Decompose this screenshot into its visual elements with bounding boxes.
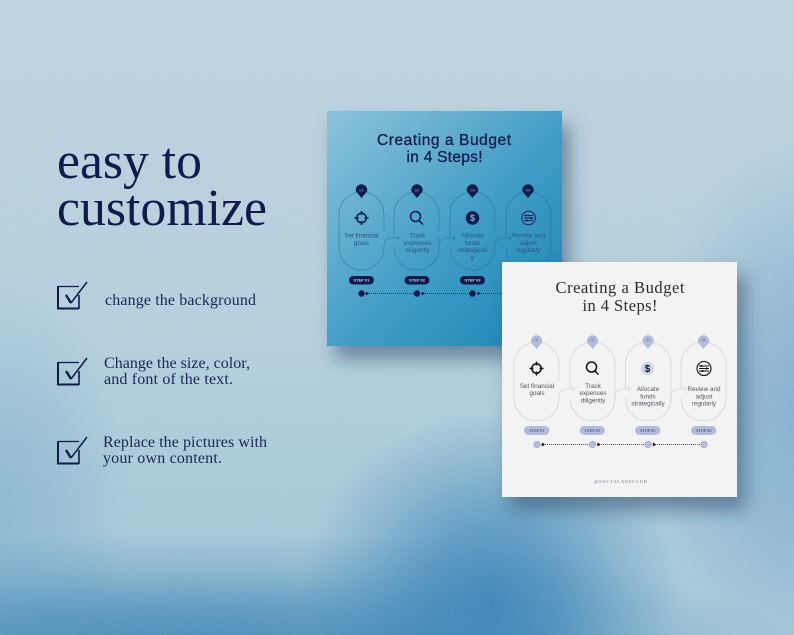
icon: magnifier <box>410 212 423 224</box>
pin numbers <box>359 188 531 192</box>
step text: y <box>471 254 475 262</box>
heading: easy to customize: customize <box>57 180 267 237</box>
step text: Set financial <box>344 232 379 240</box>
text: replace pictures: Replace the pictures with <box>103 434 267 451</box>
step labels: STEP 02 <box>409 278 426 283</box>
icon: magnifier <box>586 362 598 374</box>
icon: target <box>530 362 544 376</box>
pin numbers: 01 <box>359 188 364 192</box>
step text: expenses <box>580 390 606 397</box>
title: blue card: Creating a Budget <box>377 132 512 149</box>
heading: easy to customize <box>57 133 267 237</box>
step text: diligently <box>581 398 606 404</box>
step text: goals <box>529 390 545 397</box>
pin numbers: 02 <box>590 338 594 342</box>
step text: regularly <box>516 247 541 254</box>
step outlines with connecting arrows <box>339 192 551 270</box>
checklist item: change size, color, font <box>57 355 250 388</box>
icon: sliders <box>522 211 535 225</box>
pin numbers: 03 <box>470 188 475 192</box>
icon: dollar <box>466 211 479 225</box>
step text: adjust <box>696 394 713 400</box>
icon: checkbox 2 <box>57 358 87 385</box>
step text: Allocate <box>637 386 660 393</box>
pin numbers: 04 <box>526 188 531 192</box>
title: blue card <box>377 132 512 166</box>
step text: diligently <box>405 247 431 254</box>
handle: @SOCIALADSCLUB: @SOCIALADSCLUB <box>594 479 647 484</box>
step text: goals <box>354 240 369 247</box>
timeline <box>358 290 505 297</box>
icon: dollar: $ <box>645 364 651 375</box>
step text: strategicall <box>457 247 488 254</box>
title: white card: Creating a Budget <box>556 278 685 297</box>
text: change size, color, font: and font of the text. <box>104 371 233 388</box>
text: replace pictures <box>103 434 267 467</box>
pin numbers: 04 <box>702 338 706 342</box>
pin numbers <box>534 338 706 342</box>
icon: target <box>354 211 368 225</box>
checklist item: replace pictures <box>57 434 267 467</box>
text: replace pictures: your own content. <box>103 450 222 467</box>
number pins <box>531 335 709 349</box>
icon: sliders <box>697 362 711 376</box>
step labels: STEP 01 <box>529 428 544 433</box>
step text: Review and <box>688 386 721 393</box>
step labels: STEP 02 <box>584 428 600 433</box>
title: white card: in 4 Steps! <box>582 296 658 315</box>
step text: funds <box>640 394 656 400</box>
step text: Allocate <box>461 232 484 240</box>
panel: blue budget card <box>327 111 562 346</box>
heading: easy to customize: easy to <box>57 133 202 190</box>
step labels <box>524 426 716 435</box>
step text: expenses <box>404 240 431 247</box>
step labels: STEP 01 <box>354 278 370 283</box>
step text <box>520 383 721 408</box>
step text <box>344 232 545 262</box>
step outlines with connecting arrows <box>514 342 726 421</box>
checklist item: change the background <box>57 282 256 309</box>
icon: dollar <box>641 362 654 375</box>
step text: regularly <box>692 400 717 408</box>
step labels: STEP 04 <box>696 428 712 433</box>
timeline <box>534 441 707 448</box>
step labels: STEP 03 <box>465 278 481 283</box>
text: change size, color, font <box>104 355 250 388</box>
pin numbers: 03 <box>646 338 650 342</box>
number pins <box>356 184 534 198</box>
step text: Review and <box>512 232 545 240</box>
step labels: STEP 03 <box>640 428 655 433</box>
text: change size, color, font: Change the size, color, <box>104 355 250 372</box>
step text: adjust <box>520 240 537 247</box>
pin numbers: 02 <box>415 188 420 192</box>
title: blue card: in 4 Steps! <box>406 149 482 166</box>
icon: checkbox 3 <box>57 437 87 464</box>
panel: white budget card <box>502 262 737 497</box>
step text: Track <box>585 383 602 390</box>
title: white card <box>556 278 685 315</box>
step text: funds <box>465 240 480 247</box>
pin numbers: 01 <box>534 338 538 342</box>
icon: checkbox 1 <box>57 282 87 309</box>
text: change the background: change the background <box>105 292 256 309</box>
step text: strategically <box>631 400 665 408</box>
icon: dollar: $ <box>470 213 475 223</box>
step text: Track <box>410 232 426 240</box>
step text: Set financial <box>520 383 554 390</box>
step labels <box>349 276 485 284</box>
